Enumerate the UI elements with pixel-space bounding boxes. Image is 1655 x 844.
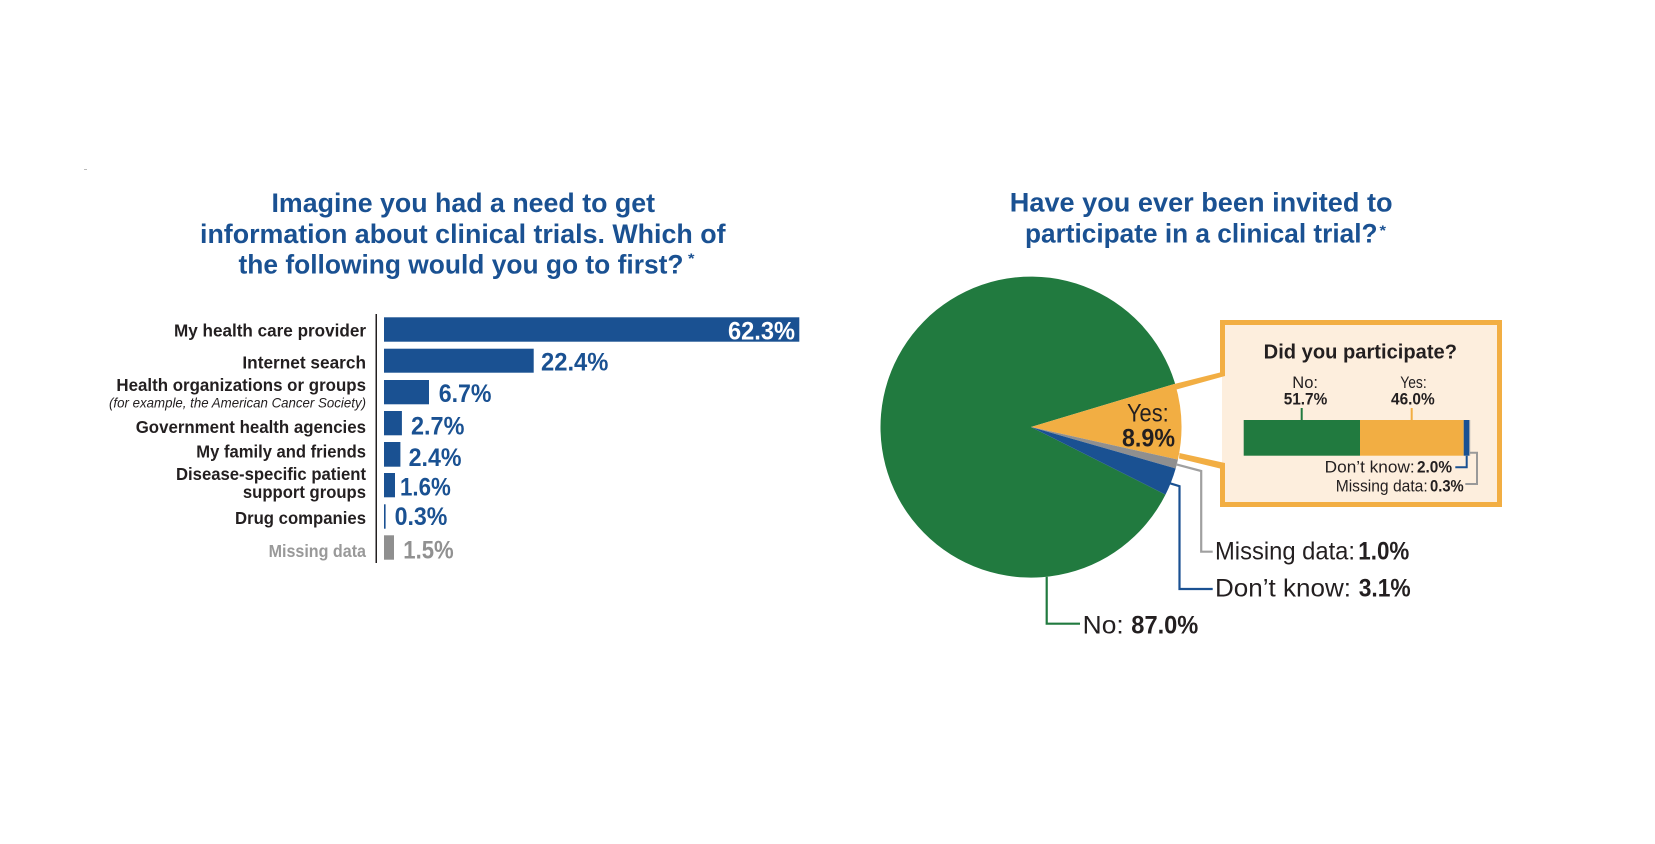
row: government health agencies 2.7% [136, 411, 464, 440]
heading: information sources question: the following would you go to first? [238, 250, 684, 280]
label: yes 8.9%: 8.9% [1122, 425, 1175, 453]
label: no 51.7% [1284, 374, 1328, 420]
callout: did you participate [1174, 322, 1500, 504]
label: missing data 1.0% [1176, 464, 1409, 565]
slice: yes 8.9% [1031, 384, 1181, 460]
row: missing data 1.5% [269, 535, 454, 564]
row: drug companies 0.3%: Drug companies [235, 508, 366, 528]
pie chart: invited to a clinical trial [880, 277, 1181, 578]
row: missing data 1.5%: 1.5% [403, 536, 454, 564]
slice: no 87.0% [880, 277, 1175, 578]
label: yes 46.0% [1391, 374, 1435, 420]
heading: information sources question: Imagine you had a need to get [272, 188, 655, 218]
slice: don't know 3.1% [1031, 427, 1176, 495]
label: no 51.7%: No: [1292, 374, 1318, 392]
row: disease-specific patient support groups 1.6%: 1.6% [400, 474, 451, 502]
row: government health agencies 2.7%: 2.7% [411, 412, 464, 440]
label: don't know 3.1%: 3.1% [1359, 575, 1411, 603]
label: yes 46.0%: Yes: [1400, 374, 1427, 392]
slice: missing data 1.0% [1031, 427, 1178, 468]
row: my family and friends 2.4%: My family and friends [196, 442, 366, 462]
label: no 51.7%: 51.7% [1284, 390, 1328, 408]
label: don't know 2.0%: 2.0% [1417, 459, 1452, 477]
row: missing data 1.5%: Missing data [269, 541, 366, 561]
callout heading: Did you participate? [1264, 341, 1457, 363]
row: my health care provider 62.3%: 62.3% [728, 317, 795, 345]
row: internet search 22.4%: Internet search [242, 352, 366, 372]
heading: invitation question: participate in a clinical trial? [1025, 219, 1378, 249]
row: health organizations or groups 6.7% [109, 375, 492, 410]
heading: invitation question: * [1380, 222, 1387, 238]
label: missing data 1.0%: Missing data: [1215, 537, 1355, 565]
label: missing data 0.3% [1336, 453, 1477, 496]
label: yes 8.9%: Yes: [1127, 400, 1169, 428]
label: don't know 3.1%: Don’t know: [1215, 575, 1351, 603]
panel: information sources [109, 188, 799, 564]
row: my health care provider 62.3% [174, 317, 799, 345]
row: drug companies 0.3%: 0.3% [395, 503, 447, 531]
heading: invitation question: Have you ever been invited to [1010, 188, 1393, 218]
row: my family and friends 2.4%: 2.4% [409, 444, 462, 472]
label: don't know 2.0%: Don’t know: [1325, 459, 1415, 477]
panel: clinical trial invitations [880, 188, 1500, 639]
label: missing data 1.0%: 1.0% [1358, 537, 1409, 565]
heading: information sources question [200, 188, 726, 280]
row: health organizations or groups 6.7%: (for example, the American Cancer Society) [109, 394, 366, 410]
label: no 87.0%: 87.0% [1131, 611, 1198, 639]
row: health organizations or groups 6.7%: 6.7% [439, 380, 492, 408]
row: health organizations or groups 6.7%: Health organizations or groups [116, 375, 366, 395]
callout box with open left side and connectors [1174, 322, 1500, 504]
row: internet search 22.4%: 22.4% [541, 348, 608, 376]
heading: information sources question: information about clinical trials. Which of [200, 219, 726, 249]
label: yes 46.0%: 46.0% [1391, 390, 1435, 408]
row: my health care provider 62.3%: My health care provider [174, 321, 366, 341]
row: internet search 22.4% [242, 348, 608, 376]
bar chart: first source of information [109, 314, 799, 564]
row: disease-specific patient support groups 1.6%: support groups [243, 482, 366, 502]
label: missing data 0.3%: 0.3% [1430, 478, 1464, 496]
row: disease-specific patient support groups 1.6% [176, 464, 451, 502]
label: no 87.0%: No: [1083, 611, 1124, 639]
label: don't know 2.0% [1325, 456, 1467, 477]
stacked bar [1244, 420, 1470, 456]
row: disease-specific patient support groups 1.6%: Disease-specific patient [176, 464, 366, 484]
chart axis [376, 314, 377, 563]
label: yes 8.9% [1122, 400, 1175, 453]
label: missing data 0.3%: Missing data: [1336, 478, 1428, 496]
row: my family and friends 2.4% [196, 442, 462, 472]
label: don't know 3.1% [1170, 483, 1411, 603]
label: no 87.0% [1047, 577, 1198, 639]
row: drug companies 0.3% [235, 503, 447, 531]
heading: invitation question [1010, 188, 1393, 249]
row: government health agencies 2.7%: Government health agencies [136, 417, 366, 437]
heading: information sources question: * [688, 250, 695, 266]
